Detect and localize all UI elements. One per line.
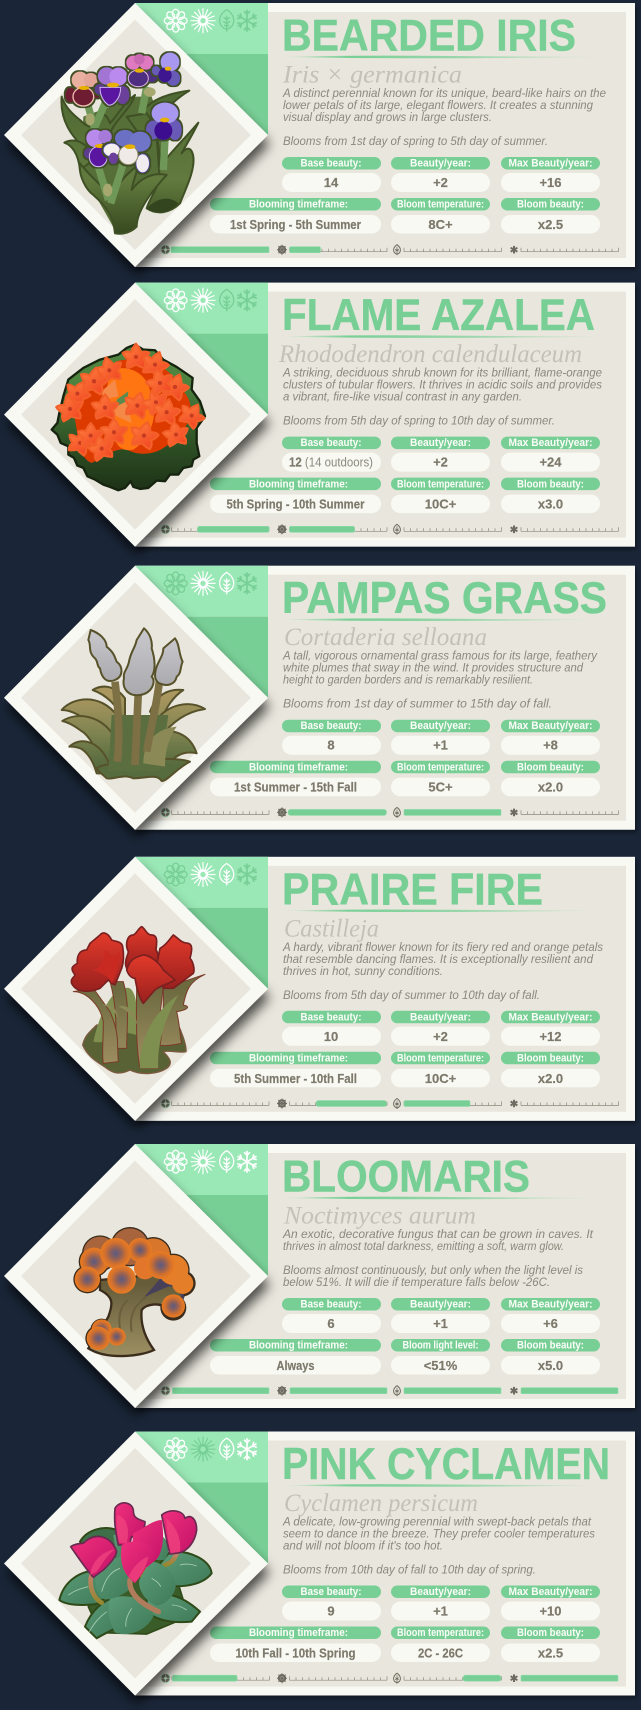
scientific name: Iris × germanica	[282, 62, 462, 88]
season bars	[161, 807, 618, 818]
description	[282, 86, 606, 148]
stats: Base beauty:	[300, 437, 362, 449]
stats: Bloom temperature:	[397, 1052, 484, 1064]
description: a vibrant, fire-like visual contrast in any garden.	[283, 390, 522, 404]
pink flowers	[71, 1503, 197, 1577]
title underline	[282, 1484, 610, 1487]
stats: 5th Spring - 10th Summer	[226, 497, 364, 512]
card: Pampas Grass	[4, 566, 635, 830]
stats: Max Beauty/year:	[508, 1298, 592, 1310]
scientific name: Noctimyces aurum	[283, 1202, 476, 1230]
stats: x2.0	[538, 1071, 563, 1086]
title: FLAME AZALEA	[282, 291, 595, 340]
stats: Bloom temperature:	[397, 199, 484, 211]
season bars	[161, 524, 618, 535]
stats: Beauty/year:	[410, 1298, 471, 1310]
description: A striking, deciduous shrub known for its brilliant, flame-orange	[282, 366, 602, 380]
green corner	[135, 566, 268, 698]
description: below 51%. It will die if temperature falls below -26C.	[283, 1275, 550, 1289]
diamond frame	[4, 3, 268, 267]
flower: white blue	[103, 130, 151, 173]
season icons	[164, 1437, 257, 1462]
description: thrives in hot, sunny conditions.	[283, 964, 443, 978]
stats: Base beauty:	[300, 1586, 362, 1598]
stats: +1	[433, 1604, 448, 1618]
stats: +1	[433, 738, 448, 753]
stats: Bloom beauty:	[517, 1052, 584, 1064]
stats: Bloom beauty:	[517, 199, 584, 211]
stems	[91, 1553, 177, 1603]
stats: +8	[543, 738, 558, 753]
description: visual display and grows in large clusters.	[283, 110, 492, 124]
stats: 10C+	[425, 497, 457, 512]
stats: +2	[433, 455, 448, 470]
petal highlights	[90, 1515, 180, 1583]
season bars	[161, 1673, 618, 1684]
stats: 5th Summer - 10th Fall	[234, 1071, 357, 1086]
description: A distinct perennial known for its unique, beard-like hairs on the	[282, 86, 606, 100]
green corner	[135, 857, 268, 989]
card: Bearded Iris	[4, 3, 635, 267]
stats: Bloom temperature:	[397, 478, 484, 490]
stats: Blooming timeframe:	[249, 761, 348, 773]
description: A delicate, low-growing perennial with swept-back petals that	[282, 1514, 592, 1528]
stats: +1	[433, 1316, 448, 1331]
cap outline	[73, 1227, 196, 1351]
card: Prairie Fire	[4, 857, 635, 1121]
stats: x5.0	[538, 1358, 563, 1373]
stats: Beauty/year:	[410, 437, 471, 449]
description: Blooms from 10th day of fall to 10th day of spring.	[283, 1562, 536, 1576]
description: A hardy, vibrant flower known for its fiery red and orange petals	[282, 940, 603, 954]
stats: Bloom light level:	[402, 1340, 478, 1352]
stats: 8	[327, 738, 335, 753]
shrub body	[52, 345, 205, 490]
season icons	[164, 1149, 257, 1174]
flower mass	[75, 359, 191, 463]
diamond frame	[4, 566, 268, 830]
stats: Max Beauty/year:	[508, 158, 592, 170]
stats: Beauty/year:	[410, 720, 471, 732]
stats: Base beauty:	[300, 720, 362, 732]
illustration: pampas grass	[62, 628, 205, 781]
stats: 9	[327, 1604, 335, 1618]
stats: Blooming timeframe:	[249, 478, 348, 490]
glowing caps	[75, 1228, 193, 1350]
description: thrives in almost total darkness, emitting a soft, warm glow.	[283, 1239, 564, 1253]
description: Blooms from 5th day of summer to 10th day of fall.	[283, 988, 540, 1002]
title underline	[282, 56, 610, 58]
illustration: cyclamen	[59, 1503, 212, 1638]
flower: maroon	[65, 72, 101, 106]
description: lower petals of its large, elegant flowers. It creates a stunning	[283, 98, 593, 112]
stats: Bloom temperature:	[397, 761, 484, 773]
stats: Beauty/year:	[410, 1586, 471, 1598]
stats: 8C+	[428, 217, 453, 232]
card: Flame Azalea	[4, 283, 635, 547]
stats: 10th Fall - 10th Spring	[236, 1646, 356, 1660]
description: Blooms from 1st day of summer to 15th day of fall.	[283, 697, 552, 711]
season bars	[161, 1098, 618, 1109]
stats: Bloom beauty:	[517, 1627, 584, 1639]
card: Bloomaris	[4, 1144, 635, 1408]
stats: Bloom beauty:	[517, 1340, 584, 1352]
title: BLOOMARIS	[282, 1152, 530, 1202]
description: An exotic, decorative fungus that can be grown in caves. It	[282, 1227, 594, 1241]
stats: <51%	[424, 1358, 458, 1373]
season icons	[164, 862, 257, 887]
green corner	[135, 3, 268, 135]
stats	[210, 437, 600, 513]
diamond frame	[4, 857, 268, 1121]
stats	[210, 1011, 600, 1087]
stats: 6	[327, 1316, 335, 1331]
card panel	[135, 857, 635, 1121]
stats: +24	[539, 455, 562, 470]
flower: blue violet right	[146, 103, 182, 140]
title underline	[282, 618, 610, 621]
stats: x2.5	[538, 1646, 563, 1660]
green corner	[135, 283, 268, 415]
green corner	[135, 1432, 268, 1564]
stats: Bloom beauty:	[517, 478, 584, 490]
stats: Beauty/year:	[410, 158, 471, 170]
title underline	[282, 1197, 610, 1199]
title underline	[282, 909, 610, 912]
illustration: bloomaris	[73, 1227, 196, 1356]
scientific name: Castilleja	[284, 915, 379, 942]
stats: 1st Spring - 5th Summer	[230, 217, 361, 232]
description: Blooms from 5th day of spring to 10th day of summer.	[283, 414, 555, 428]
stats	[210, 1298, 600, 1374]
ground	[83, 1022, 186, 1074]
description: Blooms from 1st day of spring to 5th day of summer.	[283, 134, 548, 148]
leaf mass	[82, 97, 163, 230]
stats: Always	[276, 1358, 314, 1373]
stats: Max Beauty/year:	[508, 1011, 592, 1023]
stats	[210, 720, 600, 796]
grass blades	[62, 687, 205, 781]
description: Blooms almost continuously, but only when the light level is	[283, 1263, 583, 1277]
stats: +2	[433, 175, 448, 190]
stalks	[73, 974, 205, 1068]
fungus stem	[88, 1273, 184, 1356]
title: BEARDED IRIS	[282, 12, 576, 60]
stats	[210, 157, 600, 234]
stats: +16	[539, 175, 562, 190]
stats: Base beauty:	[300, 1298, 362, 1310]
stats: +12	[539, 1029, 562, 1044]
season bars	[161, 1386, 618, 1396]
flower: violet lower	[84, 130, 112, 167]
card panel	[135, 1432, 635, 1696]
stats: Bloom temperature:	[397, 1627, 484, 1639]
stats: x3.0	[538, 497, 563, 512]
season bars	[161, 245, 618, 255]
description	[282, 649, 598, 711]
title: PRAIRE FIRE	[282, 865, 543, 914]
flower: blue violet top	[152, 53, 180, 86]
description: A tall, vigorous ornamental grass famous for its large, feathery	[282, 649, 598, 663]
stats: x2.0	[538, 780, 563, 795]
stats: Bloom beauty:	[517, 761, 584, 773]
card: Pink Cyclamen	[4, 1432, 635, 1696]
scientific name: Rhododendron calendulaceum	[278, 341, 582, 368]
diamond frame	[4, 1144, 268, 1408]
leaves	[59, 1528, 212, 1638]
stats: Max Beauty/year:	[508, 1586, 592, 1598]
description: white plumes that sway in the wind. It provides structure and	[283, 661, 583, 675]
title: PAMPAS GRASS	[282, 574, 607, 623]
card panel	[135, 566, 635, 830]
stats: 2C - 26C	[418, 1646, 464, 1660]
stems	[115, 682, 159, 765]
stats: 10C+	[425, 1071, 457, 1086]
description: and will not bloom if it's too hot.	[283, 1538, 443, 1552]
stats: Max Beauty/year:	[508, 437, 592, 449]
stats: +6	[543, 1316, 558, 1331]
leaf veins	[68, 1564, 197, 1632]
stats: 12 (14 outdoors)	[289, 455, 373, 470]
description	[282, 940, 603, 1002]
description: that resemble dancing flames. It is exceptionally resilient and	[283, 952, 593, 966]
stats: Base beauty:	[300, 1011, 362, 1023]
illustration: azalea	[52, 344, 209, 490]
diamond frame	[4, 283, 268, 547]
stats: 10	[324, 1029, 338, 1044]
stats: Blooming timeframe:	[249, 199, 348, 211]
red blooms	[71, 927, 194, 1003]
stats: +2	[433, 1029, 448, 1044]
green corner	[135, 1144, 268, 1276]
description	[282, 366, 602, 428]
illustration: iris	[61, 53, 198, 234]
plumes	[88, 628, 183, 695]
scientific name: Cyclamen persicum	[284, 1490, 478, 1517]
card panel	[135, 283, 635, 547]
description: clusters of tubular flowers. It thrives in acidic soils and provides	[283, 378, 602, 392]
season icons	[164, 8, 257, 33]
stats: x2.5	[538, 217, 563, 232]
stats: +10	[539, 1604, 562, 1618]
description	[282, 1514, 595, 1576]
stats: 14	[324, 175, 339, 190]
diamond frame	[4, 1432, 268, 1696]
card panel	[135, 1144, 635, 1408]
description	[282, 1227, 594, 1289]
season icons	[164, 571, 257, 596]
description: height to garden borders and is remarkably resilient.	[283, 673, 533, 687]
card panel	[135, 3, 635, 267]
stats: Blooming timeframe:	[249, 1627, 348, 1639]
season icons	[164, 288, 257, 313]
flower: pink purple	[126, 54, 158, 87]
illustration: prairie fire	[71, 927, 205, 1074]
description: seem to dance in the breeze. They prefer cooler temperatures	[283, 1526, 595, 1540]
stats: Max Beauty/year:	[508, 720, 592, 732]
stats: Base beauty:	[300, 158, 362, 170]
stats: 5C+	[428, 780, 453, 795]
stats: Blooming timeframe:	[249, 1340, 348, 1352]
flower: violet	[95, 67, 129, 105]
stats: Beauty/year:	[410, 1011, 471, 1023]
stats	[210, 1586, 600, 1662]
scientific name: Cortaderia selloana	[284, 624, 487, 651]
stats: 1st Summer - 15th Fall	[234, 780, 357, 795]
stats: Blooming timeframe:	[249, 1052, 348, 1064]
title underline	[282, 335, 615, 338]
